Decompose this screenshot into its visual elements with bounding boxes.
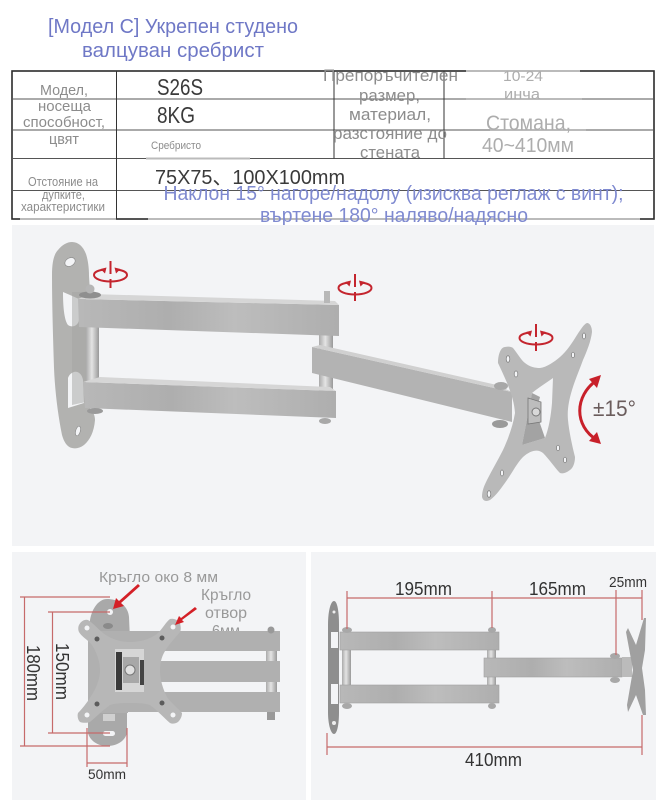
middle labels: recommended size, material, wall distance: стената [360,144,421,162]
icon: rotation at plate [520,324,552,351]
arrow: tilt [580,375,601,444]
forearm [312,345,512,428]
icon: rotation at elbow [338,274,372,301]
right values: size, material, distance: Стомана, [486,112,571,135]
wall plate [328,601,339,734]
specification table [12,67,654,227]
VESA plate side view [626,618,646,715]
arrow: eye hole [113,584,140,609]
25mm label: 25mm [609,574,647,591]
row labels: model, load, colour: способност, [23,114,105,131]
hole spacing value: 75X75、100X100mm [155,167,345,189]
title: [Модел С] Укрепен студено [48,16,298,38]
row labels: model, load, colour: носеща [38,98,92,115]
features text [164,183,624,227]
right values: size, material, distance: инча [504,86,541,103]
right values: size, material, distance [482,68,574,157]
hole spacing and features labels [21,175,105,214]
410mm label: 410mm [465,750,522,770]
tilt label: ±15° [593,396,636,421]
round hole label: Кръгло [201,587,251,604]
lower arm [83,377,336,424]
posts [342,650,496,685]
VESA plate [482,323,592,501]
values: model, load, colour [151,74,203,152]
180mm label: 180mm [23,645,43,701]
values: model, load, colour: Сребристо [151,140,201,152]
hole spacing and features labels: Отстояние на [28,175,98,189]
panel: side view dimensions [311,552,656,800]
upper arm [340,632,499,650]
arrow: round hole [175,607,197,625]
150mm label: 150mm [52,643,72,700]
middle labels: recommended size, material, wall distance: размер, [359,87,420,105]
hole spacing and features labels: характеристики [21,200,105,214]
dimension lines [327,590,642,755]
middle labels: recommended size, material, wall distance [323,67,458,162]
bolts [342,627,632,709]
wall plate [88,599,130,746]
values: model, load, colour: 8KG [157,102,195,128]
165mm label: 165mm [529,579,586,599]
lower arm [340,685,499,703]
round hole label: 6мм [212,623,240,640]
title: валцуван сребрист [82,40,264,62]
dimension lines [20,597,127,767]
195mm label: 195mm [395,579,452,599]
features text: Наклон 15° нагоре/надолу (изисква реглаж с винт); [164,183,624,205]
values: model, load, colour: S26S [157,74,203,100]
row labels: model, load, colour: Модел, [40,82,88,99]
right values: size, material, distance: 10-24 [503,68,543,85]
icon: rotation at wall [94,261,127,288]
VESA plate [78,619,182,724]
row labels: model, load, colour [23,82,105,148]
support posts [86,326,333,392]
upper arm [78,284,339,336]
panel: product photo [12,225,654,546]
hole spacing and features labels: дупките, [42,188,85,202]
50mm label: 50mm [88,766,126,782]
features text: въртене 180° наляво/надясно [260,205,528,227]
right values: size, material, distance: 40~410мм [482,135,574,157]
panel: front view dimensions [12,552,306,800]
round hole label: отвор [205,605,247,622]
round hole label [201,587,251,640]
title [48,16,298,62]
middle labels: recommended size, material, wall distance: материал, [349,106,431,124]
eye hole label: Кръгло око 8 мм [99,569,218,586]
row labels: model, load, colour: цвят [49,131,79,148]
swing arms [100,626,280,720]
forearm [484,658,622,677]
wall plate [52,242,95,448]
middle labels: recommended size, material, wall distance: разстояние до [333,125,447,143]
middle labels: recommended size, material, wall distance: Препоръчителен [323,67,458,85]
